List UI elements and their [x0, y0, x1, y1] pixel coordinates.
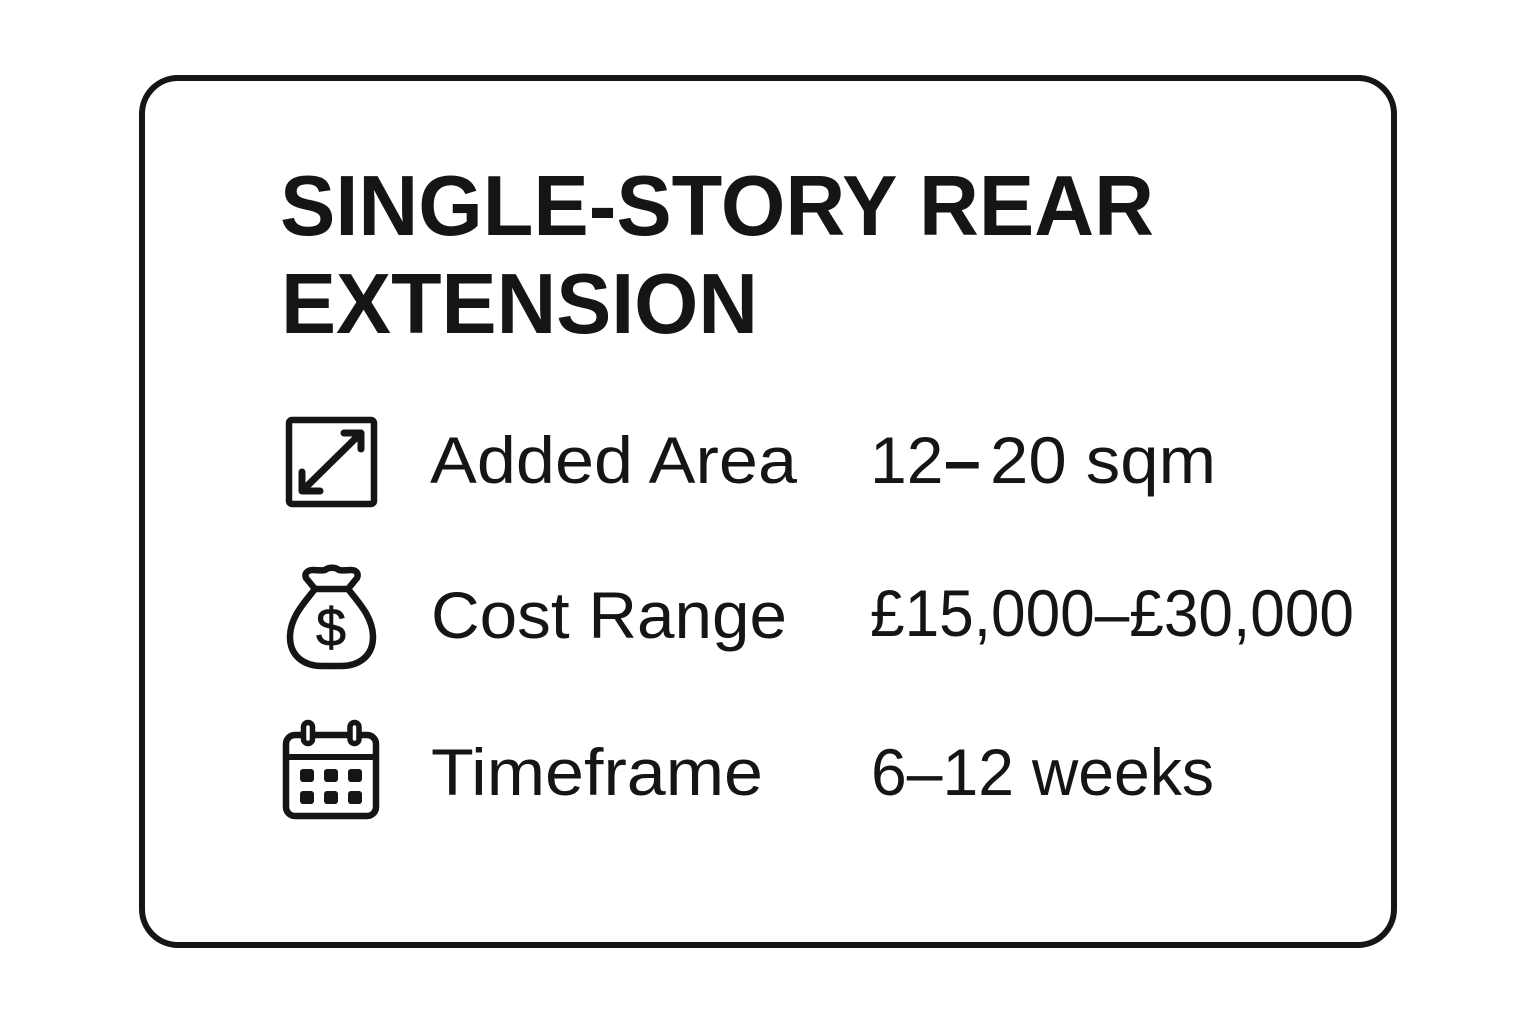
- heading: EXTENSION: [281, 257, 758, 352]
- icon: money bag: $: [316, 598, 346, 658]
- value: added area: 12: [870, 423, 943, 497]
- label: timeframe: Timeframe: [431, 735, 763, 809]
- label: added area: Added Area: [430, 423, 797, 497]
- value: added area: –: [944, 423, 981, 497]
- value: added area: 20 sqm: [990, 423, 1216, 497]
- row: cost range: [290, 568, 1354, 666]
- row: added area: [289, 420, 1216, 504]
- label: cost range: Cost Range: [431, 578, 787, 652]
- heading: [280, 159, 1154, 352]
- value: timeframe: 6–12 weeks: [871, 735, 1214, 809]
- row: timeframe: [286, 722, 1214, 816]
- heading: SINGLE-STORY REAR: [280, 159, 1154, 254]
- icon: expand arrows in square: [289, 420, 374, 504]
- icon: calendar: [286, 722, 376, 816]
- value: cost range: £15,000–£30,000: [870, 576, 1354, 650]
- icon: money bag: [290, 568, 373, 666]
